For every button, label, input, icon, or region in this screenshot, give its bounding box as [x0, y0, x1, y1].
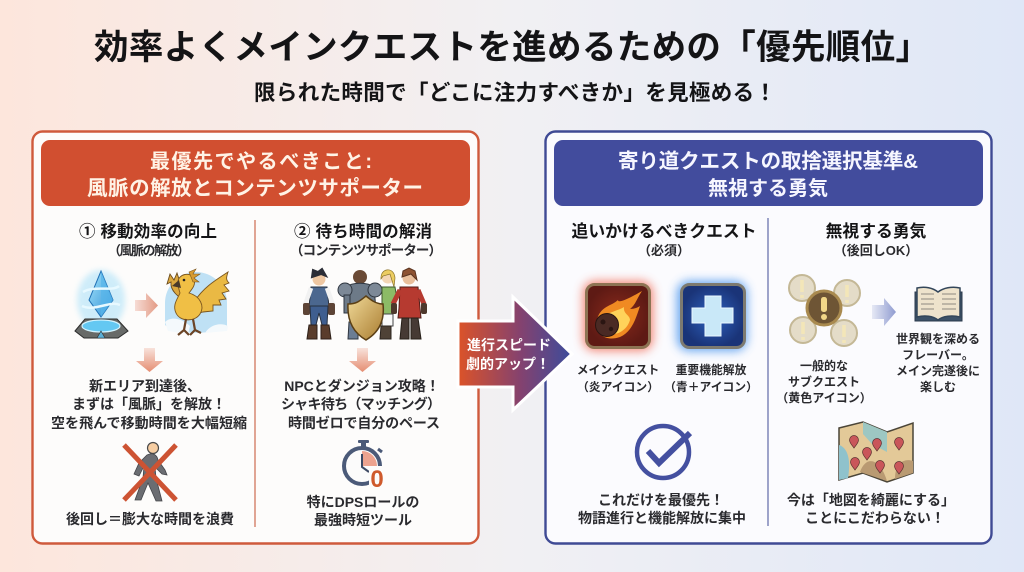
icon: plus tile — [677, 281, 747, 351]
text: DPS tool: 最強時短ツール — [314, 512, 412, 528]
column heading: waiting: ② 待ち時間の解消 — [294, 222, 432, 241]
label: main quest: （炎アイコン） — [577, 380, 659, 394]
text: do not fuss over map: ことにこだわらない！ — [805, 510, 945, 526]
panel heading: top priority — [41, 140, 470, 206]
text: flavor: メイン完遂後に — [896, 363, 980, 378]
text: flavor: 世界観を深める — [896, 331, 980, 346]
icon: open book — [915, 287, 962, 321]
text: flavor: 楽しむ — [920, 379, 956, 394]
arrow: sub quest to book — [872, 298, 896, 326]
text: NPC and dungeons: シャキ待ち（マッチング） — [281, 396, 441, 412]
text: prioritize: 物語進行と機能解放に集中 — [578, 510, 746, 526]
label: main quest — [577, 363, 659, 394]
text: open aether currents — [51, 378, 247, 431]
text: NPC and dungeons: 時間ゼロで自分のペース — [288, 415, 440, 431]
icon: chocobo — [165, 269, 229, 335]
text: NPC and dungeons — [281, 378, 441, 431]
label: feature unlock: 重要機能解放 — [676, 363, 747, 377]
text: flavor — [896, 331, 980, 394]
subtitle: 限られた時間で「どこに注力すべきか」を見極める！ — [254, 81, 776, 105]
hero 4 — [391, 268, 427, 339]
body — [175, 274, 202, 320]
text: prioritize: これだけを最優先！ — [598, 492, 724, 508]
column: ignore — [776, 222, 980, 526]
text: do not fuss over map — [787, 492, 955, 526]
arrow: speed up: 劇的アップ！ — [466, 356, 550, 372]
arrow: speed up: 進行スピード — [467, 337, 551, 353]
column heading: movement: ① 移動効率の向上 — [79, 222, 217, 241]
icon: check — [637, 426, 690, 478]
panel: top priority — [32, 132, 478, 544]
column subheading: ignore: （後回しOK） — [834, 243, 918, 258]
hero 1 — [303, 269, 335, 339]
icon: crystal on aetheryte — [75, 270, 128, 338]
hero 2 — [338, 270, 382, 339]
text: DPS tool: 特にDPSロールの — [307, 494, 419, 510]
text: skipping wastes time: 後回し＝膨大な時間を浪費 — [66, 511, 234, 527]
text: NPC and dungeons: NPCとダンジョン攻略！ — [284, 378, 440, 394]
text: open aether currents: 空を飛んで移動時間を大幅短縮 — [51, 415, 247, 431]
icon: stopwatch zero: 0 — [370, 466, 384, 493]
column subheading: waiting: （コンテンツサポーター） — [290, 243, 442, 258]
arrow: speed up — [458, 297, 572, 410]
panel heading: detours: 無視する勇気 — [708, 177, 828, 200]
column heading: must: 追いかけるべきクエスト — [572, 222, 756, 241]
text: prioritize — [578, 492, 746, 526]
column: movement efficiency — [51, 222, 247, 527]
icon: sub quest markers — [789, 275, 860, 346]
text: do not fuss over map: 今は「地図を綺麗にする」 — [787, 492, 955, 508]
label: general sub quest — [776, 358, 872, 405]
arrow: crystal to chocobo — [135, 293, 158, 318]
column heading: ignore: 無視する勇気 — [826, 222, 927, 241]
column subheading: must: （必須） — [638, 243, 690, 258]
icon: map with pins — [839, 422, 913, 482]
label: feature unlock — [664, 363, 758, 394]
panel heading: detours — [554, 140, 983, 206]
right wing — [194, 272, 229, 314]
panel heading: top priority: 風脈の解放とコンテンツサポーター — [87, 177, 423, 200]
column: must-follow quests — [572, 222, 758, 526]
column subheading: movement: （風脈の解放） — [108, 243, 190, 258]
arrow: down left — [136, 348, 163, 372]
label: general sub quest: 一般的な — [800, 358, 848, 373]
icon: party with shield — [303, 268, 427, 340]
label: general sub quest: サブクエスト — [788, 374, 860, 389]
label: main quest: メインクエスト — [577, 363, 659, 377]
panel heading: top priority: 最優先でやるべきこと: — [150, 150, 372, 173]
panel heading: detours: 寄り道クエストの取捨選択基準& — [618, 150, 918, 173]
label: feature unlock: （青＋アイコン） — [664, 380, 758, 394]
text: DPS tool — [307, 494, 419, 528]
title: 効率よくメインクエストを進めるための「優先順位」 — [94, 29, 930, 67]
icon: crossed out walker — [124, 442, 176, 501]
left wing — [167, 273, 188, 300]
text: open aether currents: まずは「風脈」を解放！ — [72, 396, 226, 412]
panel: detours and courage — [546, 132, 992, 544]
hero 3 — [380, 270, 397, 339]
column: waiting time — [281, 222, 442, 528]
text: open aether currents: 新エリア到達後、 — [89, 378, 201, 394]
icon: stopwatch zero — [344, 440, 385, 493]
text: flavor: フレーバー。 — [902, 348, 974, 362]
arrow: down right — [349, 348, 376, 372]
shield — [348, 296, 383, 340]
icon: flame tile — [583, 281, 653, 351]
label: general sub quest: （黄色アイコン） — [776, 390, 872, 405]
